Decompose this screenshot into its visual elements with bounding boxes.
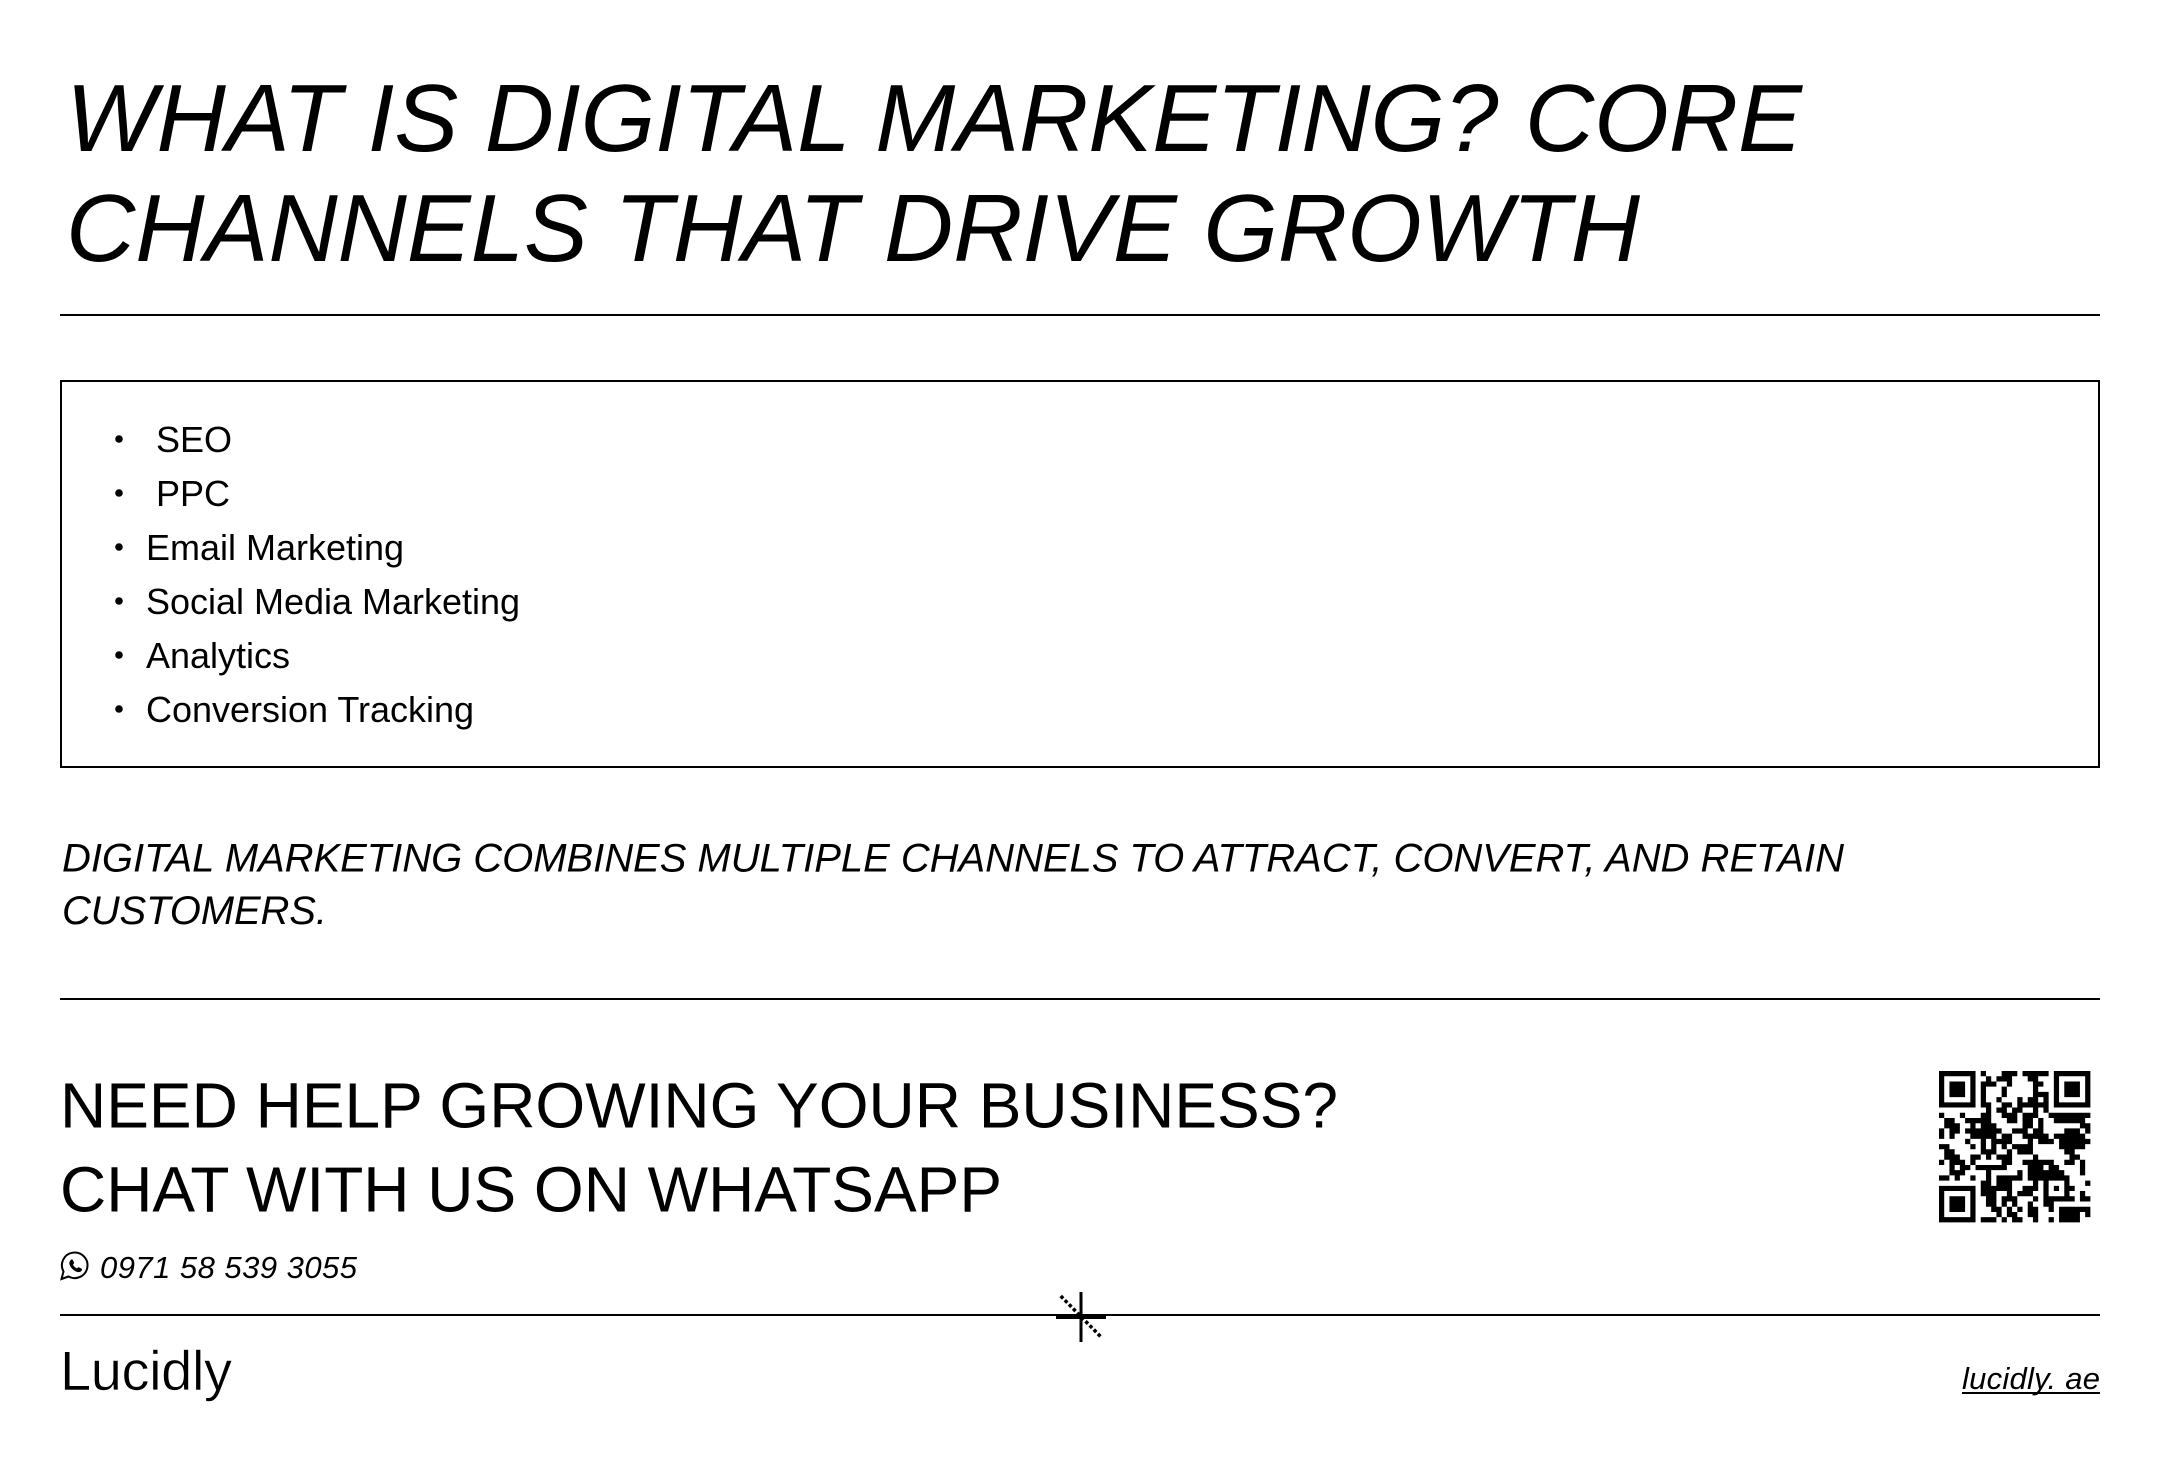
title: WHAT IS DIGITAL MARKETING? CORE <box>66 65 1803 172</box>
title: CHANNELS THAT DRIVE GROWTH <box>66 175 1641 282</box>
bullet list: PPC <box>156 473 230 514</box>
panel: core channels list <box>61 381 2099 767</box>
phone number: 0971 58 539 3055 <box>100 1250 358 1285</box>
bullet list: Social Media Marketing <box>146 581 520 622</box>
icon: star mark <box>1056 1292 1106 1342</box>
icon: QR code <box>1939 1074 2090 1220</box>
call to action heading: CHAT WITH US ON WHATSAPP <box>60 1154 1002 1226</box>
website link: lucidly. ae <box>1962 1361 2100 1396</box>
bullet list: Email Marketing <box>146 527 404 568</box>
call to action heading <box>60 1070 1338 1226</box>
logo: Lucidly <box>60 1339 232 1402</box>
bullet list: SEO <box>156 419 232 460</box>
summary paragraph <box>62 836 1844 933</box>
call to action heading: NEED HELP GROWING YOUR BUSINESS? <box>60 1070 1338 1142</box>
title <box>66 65 1803 282</box>
bullet list <box>115 419 520 730</box>
summary paragraph: DIGITAL MARKETING COMBINES MULTIPLE CHANNELS TO ATTRACT, CONVERT, AND RETAIN <box>62 836 1844 880</box>
summary paragraph: CUSTOMERS. <box>62 889 327 933</box>
bullet list: Conversion Tracking <box>146 689 474 730</box>
bullet list: Analytics <box>146 635 290 676</box>
icon: whatsapp <box>62 1253 87 1279</box>
